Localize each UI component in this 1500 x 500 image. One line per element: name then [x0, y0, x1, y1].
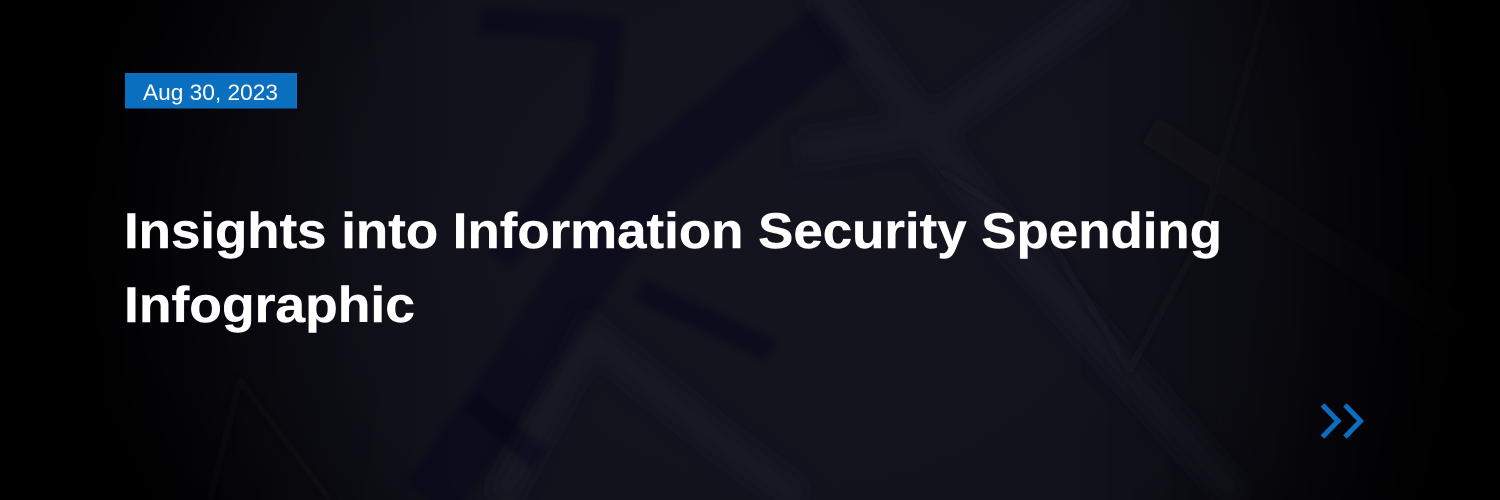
- icon: double chevron arrow: [1322, 405, 1360, 437]
- date badge: Aug 30, 2023: [143, 80, 278, 105]
- title: [124, 203, 1222, 333]
- date badge: [125, 73, 297, 108]
- title: Insights into Information Security Spending: [124, 203, 1222, 259]
- title: Infographic: [124, 277, 415, 333]
